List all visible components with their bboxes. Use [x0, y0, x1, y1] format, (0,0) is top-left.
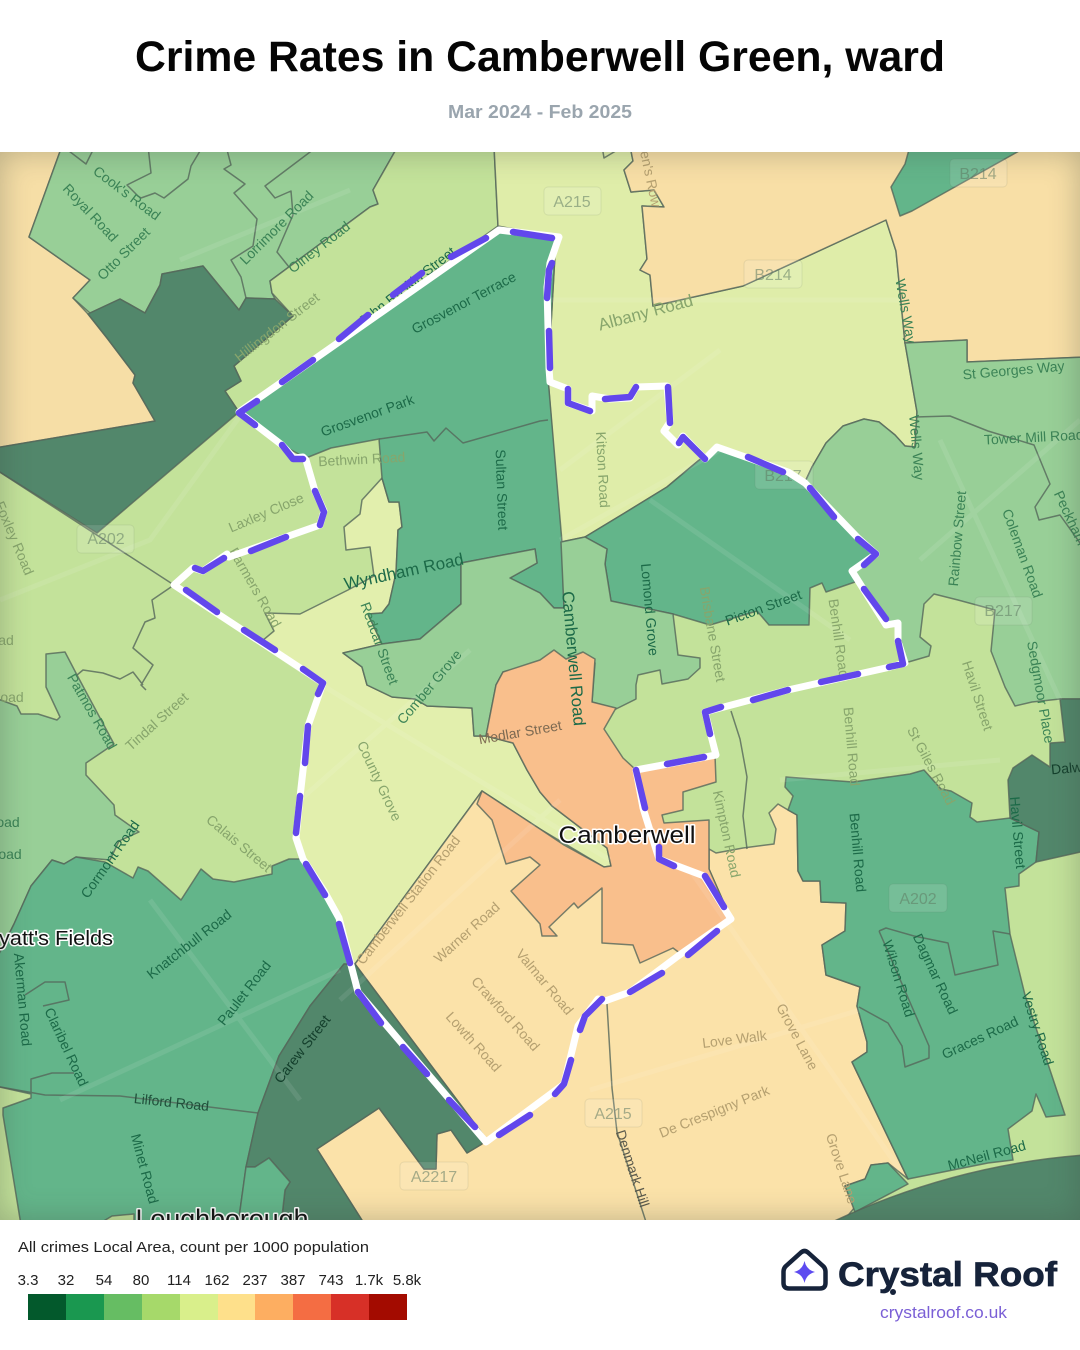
labels on mid-green areas: Coleman Road: [999, 507, 1046, 600]
area: west mid green: [0, 652, 139, 962]
ward boundary: white line with purple dashes: [174, 230, 905, 1142]
area: tan north-west: [0, 146, 155, 448]
area: mid green north-west: [29, 146, 398, 313]
labels on pale and light-green areas: Brisbane Street: [697, 585, 729, 683]
labels on mid-green areas: Wells Way: [892, 278, 919, 345]
website url: crystalroof.co.uk: [880, 1304, 1008, 1322]
labels on tan and orange areas: [353, 149, 861, 1209]
labels on green areas: Wyndham Road: [342, 550, 465, 594]
road number badges: A202: [87, 531, 125, 548]
place label: Loughborough: Loughborough: [136, 1204, 308, 1234]
area: green north-east: [890, 152, 1019, 217]
area: east mid green: [805, 340, 1080, 706]
labels on green areas: Camberwell Road: [558, 590, 589, 727]
labels on mid-green areas: Olney Road: [285, 218, 353, 276]
labels on green areas: Vestry Road: [1018, 990, 1057, 1067]
labels on tan and orange areas: Valmar Road: [513, 946, 577, 1018]
legend scale values: 114: [167, 1272, 191, 1289]
labels on pale and light-green areas: Benhill Road: [841, 706, 863, 787]
labels on pale and light-green areas: County Grove: [354, 738, 405, 824]
labels on mid-green areas: Cook's Road: [90, 163, 164, 223]
labels on mid-green areas: Rainbow Street: [945, 490, 969, 587]
labels on mid-green areas: Comber Grove: [394, 646, 465, 727]
labels on green areas: Dagmar Road: [910, 931, 961, 1017]
labels on pale and light-green areas: [0, 289, 997, 879]
area: dark green east: [1008, 699, 1080, 862]
labels on mid-green areas: [0, 163, 1080, 862]
area: dark green north-west: [0, 266, 293, 533]
legend scale values: 54: [96, 1272, 112, 1289]
labels on pale and light-green areas: Hillingdon Street: [232, 289, 322, 365]
labels on mid-green areas: Lorrimore Road: [236, 187, 317, 268]
road number badges: A2217: [411, 1169, 457, 1186]
road number badges: [77, 159, 1032, 1190]
place label: Camberwell: Camberwell: [558, 822, 696, 849]
labels on green areas: Paulet Road: [214, 958, 274, 1028]
area: tan south: [317, 791, 908, 1225]
labels on mid-green areas: Redcar Street: [357, 600, 402, 687]
labels on tan and orange areas: Camberwell Station Road: [353, 832, 463, 967]
area: Albany Road pale: [494, 146, 917, 542]
labels on mid-green areas: Royal Road: [60, 180, 121, 245]
legend scale values: 387: [280, 1272, 306, 1289]
labels on pale and light-green areas: Laxley Close: [226, 489, 306, 535]
labels on green areas: John Ruskin Street: [355, 243, 459, 329]
labels on pale and light-green areas: Farmers Road: [226, 545, 285, 630]
area: pale patch beneath Loughborough label: [104, 1213, 135, 1220]
map edge vignette: [0, 152, 1080, 1220]
labels on tan and orange areas: Lowth Road: [443, 1009, 505, 1075]
labels on mid-green areas: Sedgmoor Place: [1024, 640, 1058, 745]
road number badges: B214: [959, 166, 997, 183]
labels on green areas: Carew Street: [271, 1012, 334, 1086]
area: green patch by Loughborough: [238, 1158, 290, 1225]
area: Carew Street dark green: [246, 964, 484, 1225]
labels on tan and orange areas: Grove Lane: [773, 1001, 822, 1073]
legend scale values: 162: [204, 1272, 230, 1289]
legend scale values: 5.8k: [393, 1272, 422, 1289]
labels on green areas: Claribel Road: [41, 1005, 92, 1089]
labels on pale and light-green areas: Kimpton Road: [710, 789, 744, 879]
labels on mid-green areas: Otto Street: [94, 224, 153, 283]
labels on green areas: Knatchbull Road: [144, 906, 234, 982]
area: Hillingdon Street pale green: [225, 146, 498, 412]
road number badges: A202: [899, 891, 937, 908]
labels on green areas: Akerman Road: [11, 952, 35, 1047]
road number badges: B217: [984, 603, 1022, 620]
labels on green areas: McNeil Road: [946, 1137, 1027, 1173]
labels on pale and light-green areas: oad: [0, 689, 24, 705]
legend scale values: 1.7k: [355, 1272, 384, 1289]
labels on pale and light-green areas: St Giles Road: [904, 724, 959, 808]
area: Benhill green south-east: [785, 770, 1065, 1179]
labels on green areas: Graces Road: [939, 1013, 1021, 1062]
legend scale values: 80: [133, 1272, 149, 1289]
labels on tan and orange areas: Medlar Street: [477, 717, 563, 747]
labels on pale and light-green areas: Benhill Road: [826, 598, 852, 679]
legend title: All crimes Local Area, count per 1000 population: [18, 1239, 369, 1256]
labels on tan and orange areas: Grove Lane: [823, 1131, 861, 1206]
area: Knatchbull green south-west: [0, 857, 351, 1225]
labels on green areas: Lilford Road: [133, 1090, 210, 1114]
labels on tan and orange areas: Denmark Hill: [613, 1128, 653, 1209]
area: Camberwell orange: [477, 650, 731, 963]
labels on mid-green areas: St Georges Way: [962, 358, 1065, 382]
labels on mid-green areas: Wells Way: [906, 414, 928, 481]
area: tan north-east: [624, 146, 1080, 362]
labels on pale and light-green areas: Kitson Road: [593, 431, 613, 508]
legend scale values: 3.3: [18, 1272, 38, 1289]
area: central pale County Grove: [262, 478, 611, 965]
labels on green areas: Benhill Road: [847, 812, 869, 893]
labels on pale and light-green areas: Albany Road: [596, 291, 695, 334]
labels on pale and light-green areas: Tindal Street: [122, 689, 191, 754]
labels on green areas: Minet Road: [128, 1132, 162, 1205]
title: Crime Rates in Camberwell Green, ward: [135, 33, 945, 81]
labels on green areas: Picton Street: [723, 586, 804, 629]
place label: Myatt's Fields: yatt's Fields: [0, 927, 113, 950]
road number badges: A215: [553, 194, 591, 211]
area: Lomond Grove green: [585, 447, 876, 625]
labels on mid-green areas: Patmos Road: [64, 671, 120, 752]
labels on green areas: Sultan Street: [493, 449, 511, 531]
road number badges: B214: [754, 267, 792, 284]
road number badges: A215: [594, 1106, 632, 1123]
legend scale values: [18, 1272, 422, 1289]
legend scale values: 743: [318, 1272, 344, 1289]
area: dark green south: [835, 1154, 1080, 1220]
labels on green areas: [11, 243, 1080, 1205]
logo icon: house with star: [784, 1251, 826, 1288]
labels on green areas: Cormont Road: [77, 817, 143, 901]
labels on tan and orange areas: Crawford Road: [468, 973, 543, 1054]
labels on green areas: Grosvenor Park: [318, 391, 417, 440]
labels on tan and orange areas: en's Row: [637, 149, 665, 209]
labels on pale and light-green areas: Havil Street: [959, 659, 997, 732]
labels on tan and orange areas: Love Walk: [701, 1027, 769, 1051]
road number badges: B217: [764, 468, 802, 485]
legend colour bar: [28, 1294, 407, 1320]
area: Grosvenor and Sultan green: [239, 230, 564, 644]
area: central mid green: [343, 537, 700, 736]
legend scale values: 237: [242, 1272, 268, 1289]
labels on tan and orange areas: Warner Road: [431, 899, 503, 966]
labels on pale and light-green areas: Calais Street: [203, 811, 275, 875]
labels on tan and orange areas: De Crespigny Park: [657, 1082, 773, 1141]
legend scale values: 32: [58, 1272, 74, 1289]
area: small green at Grove Lane: [845, 1163, 908, 1212]
labels on green areas: Grosvenor Terrace: [409, 268, 519, 337]
labels on green areas: Wilson Road: [880, 938, 918, 1019]
subtitle: date range: Mar 2024 - Feb 2025: [448, 102, 632, 122]
logo wordmark: Crystal Roof: [838, 1256, 1058, 1294]
labels on pale and light-green areas: Bethwin Road: [318, 449, 406, 469]
labels on green areas: Havil Street: [1007, 796, 1029, 869]
labels on green areas: Lomond Grove: [638, 563, 662, 657]
